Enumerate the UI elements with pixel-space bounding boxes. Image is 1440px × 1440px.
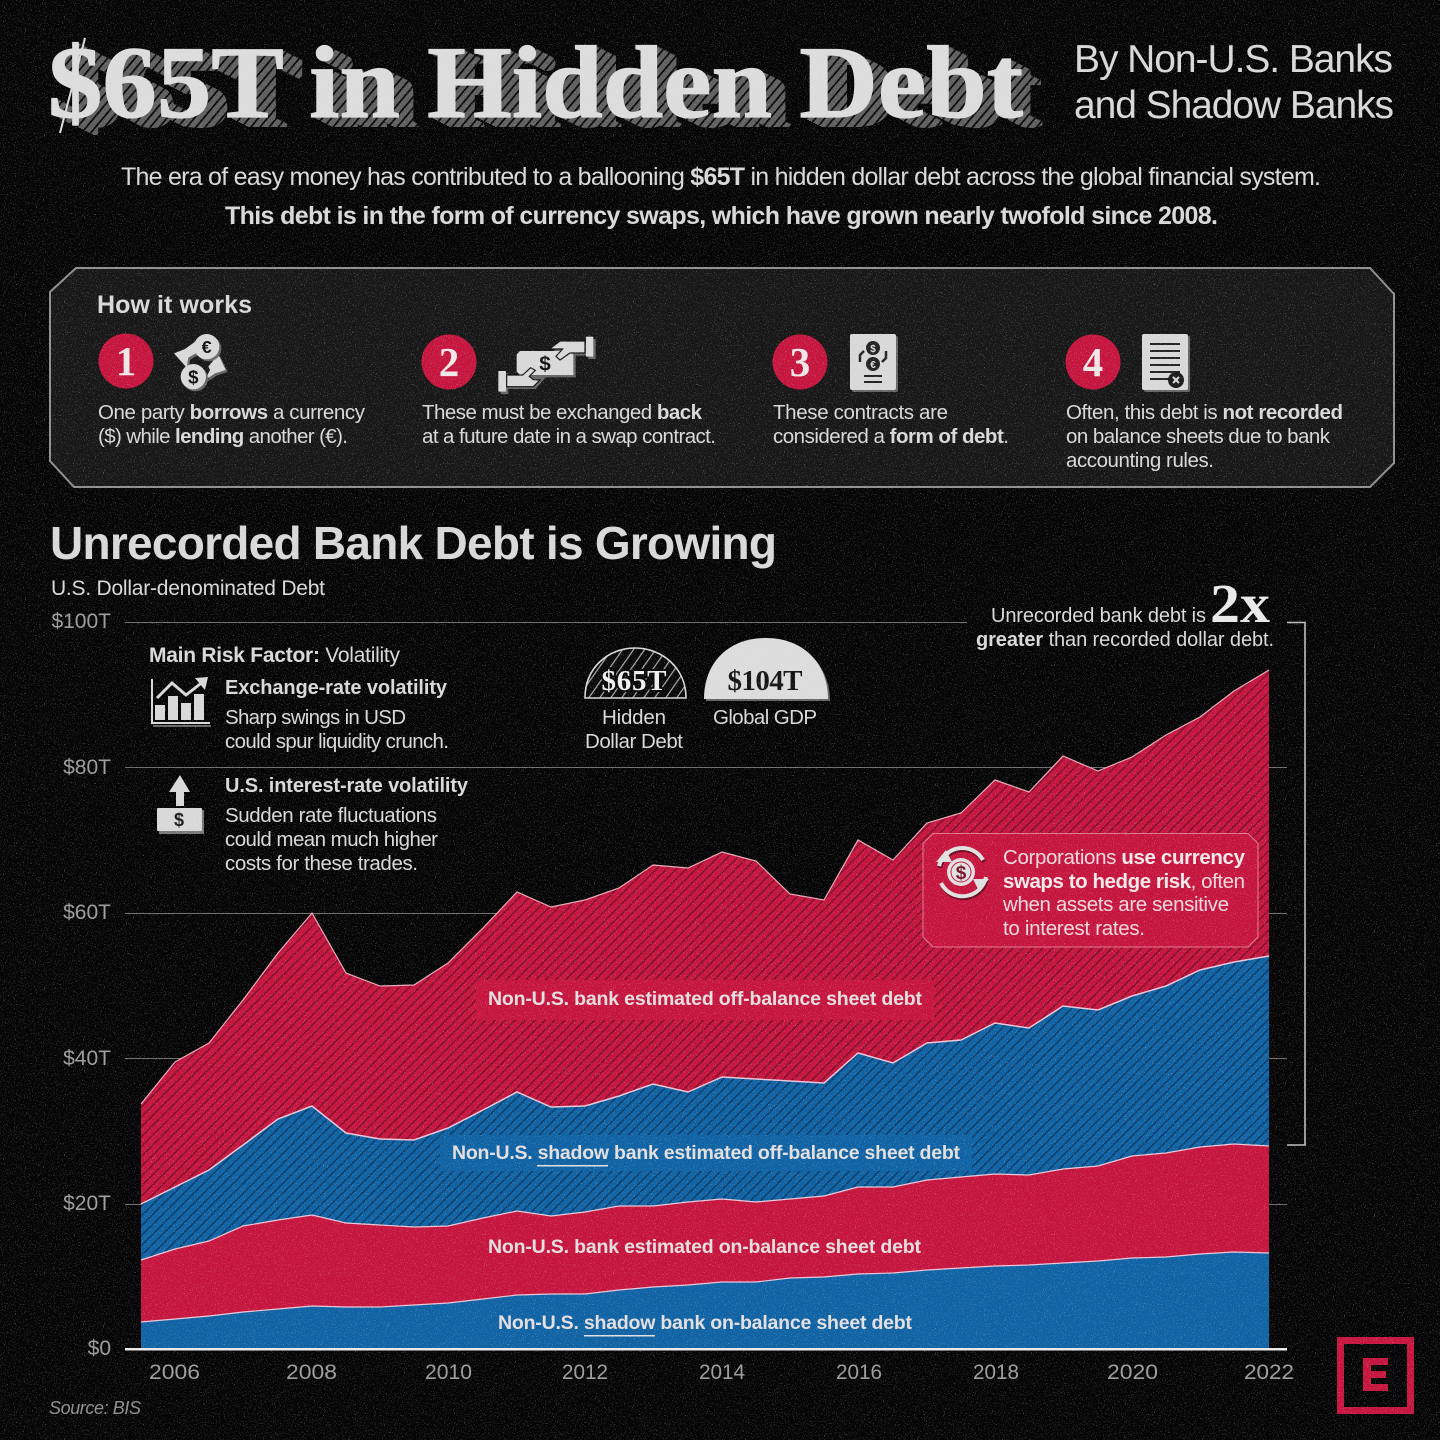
icon: unrecorded document xyxy=(1142,334,1190,392)
annotation: 2x greater xyxy=(976,573,1274,651)
text: step 3 xyxy=(773,401,1009,448)
text: step 2: These must be exchanged back xyxy=(422,401,703,424)
step 2 xyxy=(422,334,716,448)
icon: currency exchange xyxy=(174,334,228,391)
risk heading: Main Risk Factor: Volatility xyxy=(149,644,400,667)
intro text: This debt is in the form of currency swaps, which have grown nearly twofold since 2008. xyxy=(225,202,1218,230)
area: non-U.S. shadow bank off-balance sheet debt xyxy=(141,956,1269,1348)
subtitle: By Non-U.S. Banks xyxy=(1074,38,1393,81)
icon: dollar exchange cycle: $ xyxy=(956,863,967,884)
series label: shadow bank on-balance: Non-U.S. shadow bank on-balance sheet debt xyxy=(498,1312,912,1334)
subtitle: and Shadow Banks xyxy=(1074,84,1394,127)
text: interest-rate volatility: U.S. interest-rate volatility xyxy=(225,775,469,797)
series label: bank off-balance: Non-U.S. bank estimated off-balance sheet debt xyxy=(488,988,922,1010)
y axis and gridlines: $40T xyxy=(63,1047,111,1070)
icon: dollar exchange cycle xyxy=(936,848,989,898)
text: step 2 xyxy=(422,401,716,448)
x axis labels: 2022 xyxy=(1244,1361,1294,1384)
comparison: global GDP xyxy=(704,638,830,729)
title: $65T in Hidden Debt xyxy=(48,26,1023,140)
step 1: 1 xyxy=(116,338,136,384)
callout text: to interest rates. xyxy=(1003,917,1145,940)
text: exchange-rate volatility: Exchange-rate volatility xyxy=(225,677,448,699)
step 1 xyxy=(98,334,366,448)
icon: contract document: $ xyxy=(870,344,876,355)
area: non-U.S. bank off-balance sheet debt xyxy=(141,670,1269,1348)
x axis labels: 2006 xyxy=(149,1361,200,1384)
callout text xyxy=(1002,846,1246,940)
series label: shadow bank off-balance: Non-U.S. shadow bank estimated off-balance sheet debt xyxy=(452,1142,960,1164)
y axis and gridlines: $80T xyxy=(63,756,111,779)
icon: interest-rate arrow: $ xyxy=(174,810,184,830)
logo xyxy=(1340,1340,1410,1410)
x axis labels: 2018 xyxy=(973,1361,1019,1384)
chart heading: Unrecorded Bank Debt is Growing xyxy=(50,517,777,569)
x axis labels: 2008 xyxy=(286,1361,337,1384)
baseline xyxy=(125,1348,1287,1350)
text: step 4: accounting rules. xyxy=(1066,449,1214,472)
comparison: hidden dollar debt: Dollar Debt xyxy=(585,730,683,753)
area: non-U.S. bank on-balance sheet debt xyxy=(141,1144,1269,1348)
x axis labels: 2012 xyxy=(562,1361,608,1384)
y axis and gridlines: $20T xyxy=(63,1192,111,1215)
callout text: Corporations use currency xyxy=(1003,846,1246,869)
annotation: 2x greater: greater than recorded dollar debt. xyxy=(976,629,1274,651)
callout: corporations hedge risk xyxy=(923,834,1258,947)
text: step 3: These contracts are xyxy=(773,401,948,424)
annotation: 2x greater: Unrecorded bank debt is xyxy=(991,605,1206,627)
step 4 xyxy=(1066,334,1343,472)
text: step 3: considered a form of debt. xyxy=(773,425,1009,448)
intro text: The era of easy money has contributed to a ballooning $65T in hidden dollar debt across the global financial system. xyxy=(121,163,1321,191)
chart subtitle: U.S. Dollar-denominated Debt xyxy=(51,577,325,600)
icon: contract document xyxy=(850,334,898,392)
text: step 1: One party borrows a currency xyxy=(98,401,366,424)
text: step 4: Often, this debt is not recorded xyxy=(1066,401,1343,424)
bracket xyxy=(1287,622,1305,1145)
callout text: when assets are sensitive xyxy=(1002,893,1229,916)
step 4: 4 xyxy=(1083,339,1103,385)
panel: main risk factor xyxy=(149,644,469,875)
y axis and gridlines: $100T xyxy=(51,610,111,633)
area: non-U.S. shadow bank on-balance sheet debt xyxy=(141,1252,1269,1348)
y axis and gridlines: $0 xyxy=(88,1337,111,1360)
step 3 xyxy=(772,334,1009,448)
x axis labels: 2014 xyxy=(699,1361,745,1384)
text: exchange-rate volatility: could spur liquidity crunch. xyxy=(225,730,449,753)
icon: contract document: € xyxy=(870,360,876,371)
icon: swap hands xyxy=(498,337,596,394)
comparison: hidden dollar debt: $65T xyxy=(602,665,666,697)
text: exchange-rate volatility: Sharp swings in USD xyxy=(225,706,406,729)
step 2: 2 xyxy=(439,339,459,385)
icon: currency exchange: $ xyxy=(188,366,199,387)
x axis labels xyxy=(149,1361,1294,1384)
y axis and gridlines xyxy=(51,610,1287,1360)
x axis labels: 2020 xyxy=(1107,1361,1158,1384)
stacked area chart xyxy=(125,670,1287,1350)
series label: shadow bank off-balance xyxy=(440,1135,972,1171)
comparison: global GDP: $104T xyxy=(728,665,802,697)
comparison: hidden dollar debt xyxy=(585,648,686,753)
x axis labels: 2016 xyxy=(836,1361,882,1384)
icon: swap hands: $ xyxy=(539,353,551,376)
text: step 1 xyxy=(98,401,366,448)
text: step 4: on balance sheets due to bank xyxy=(1066,425,1331,448)
text: step 1: ($) while lending another (€). xyxy=(98,425,348,448)
callout text: swaps to hedge risk, often xyxy=(1003,870,1245,893)
y axis and gridlines: $60T xyxy=(63,901,111,924)
text: interest-rate volatility: costs for these trades. xyxy=(225,852,418,875)
step 3: 3 xyxy=(790,339,810,385)
icon: exchange-rate chart xyxy=(152,677,211,726)
text: interest-rate volatility: could mean much higher xyxy=(225,828,438,851)
icon: currency exchange: € xyxy=(202,337,212,357)
x axis labels: 2010 xyxy=(425,1361,472,1384)
intro text xyxy=(121,163,1321,230)
panel: how it works xyxy=(50,268,1394,487)
title: $65T in Hidden Debt xyxy=(48,26,1023,140)
text: interest-rate volatility xyxy=(225,775,469,875)
series label: bank on-balance: Non-U.S. bank estimated on-balance sheet debt xyxy=(488,1236,922,1258)
annotation: 2x greater: 2x xyxy=(1210,573,1271,634)
comparison: global GDP: Global GDP xyxy=(713,706,817,729)
series label: bank off-balance xyxy=(476,980,934,1020)
icon: interest-rate arrow xyxy=(157,775,204,834)
heading: how it works: How it works xyxy=(97,291,252,319)
subtitle xyxy=(1074,38,1394,127)
text: interest-rate volatility: Sudden rate fluctuations xyxy=(225,804,437,827)
text: step 2: at a future date in a swap contract. xyxy=(422,425,716,448)
text: exchange-rate volatility xyxy=(225,677,449,753)
source: Source: BIS xyxy=(49,1398,141,1418)
comparison: hidden dollar debt: Hidden xyxy=(602,706,666,729)
text: step 4 xyxy=(1066,401,1343,472)
